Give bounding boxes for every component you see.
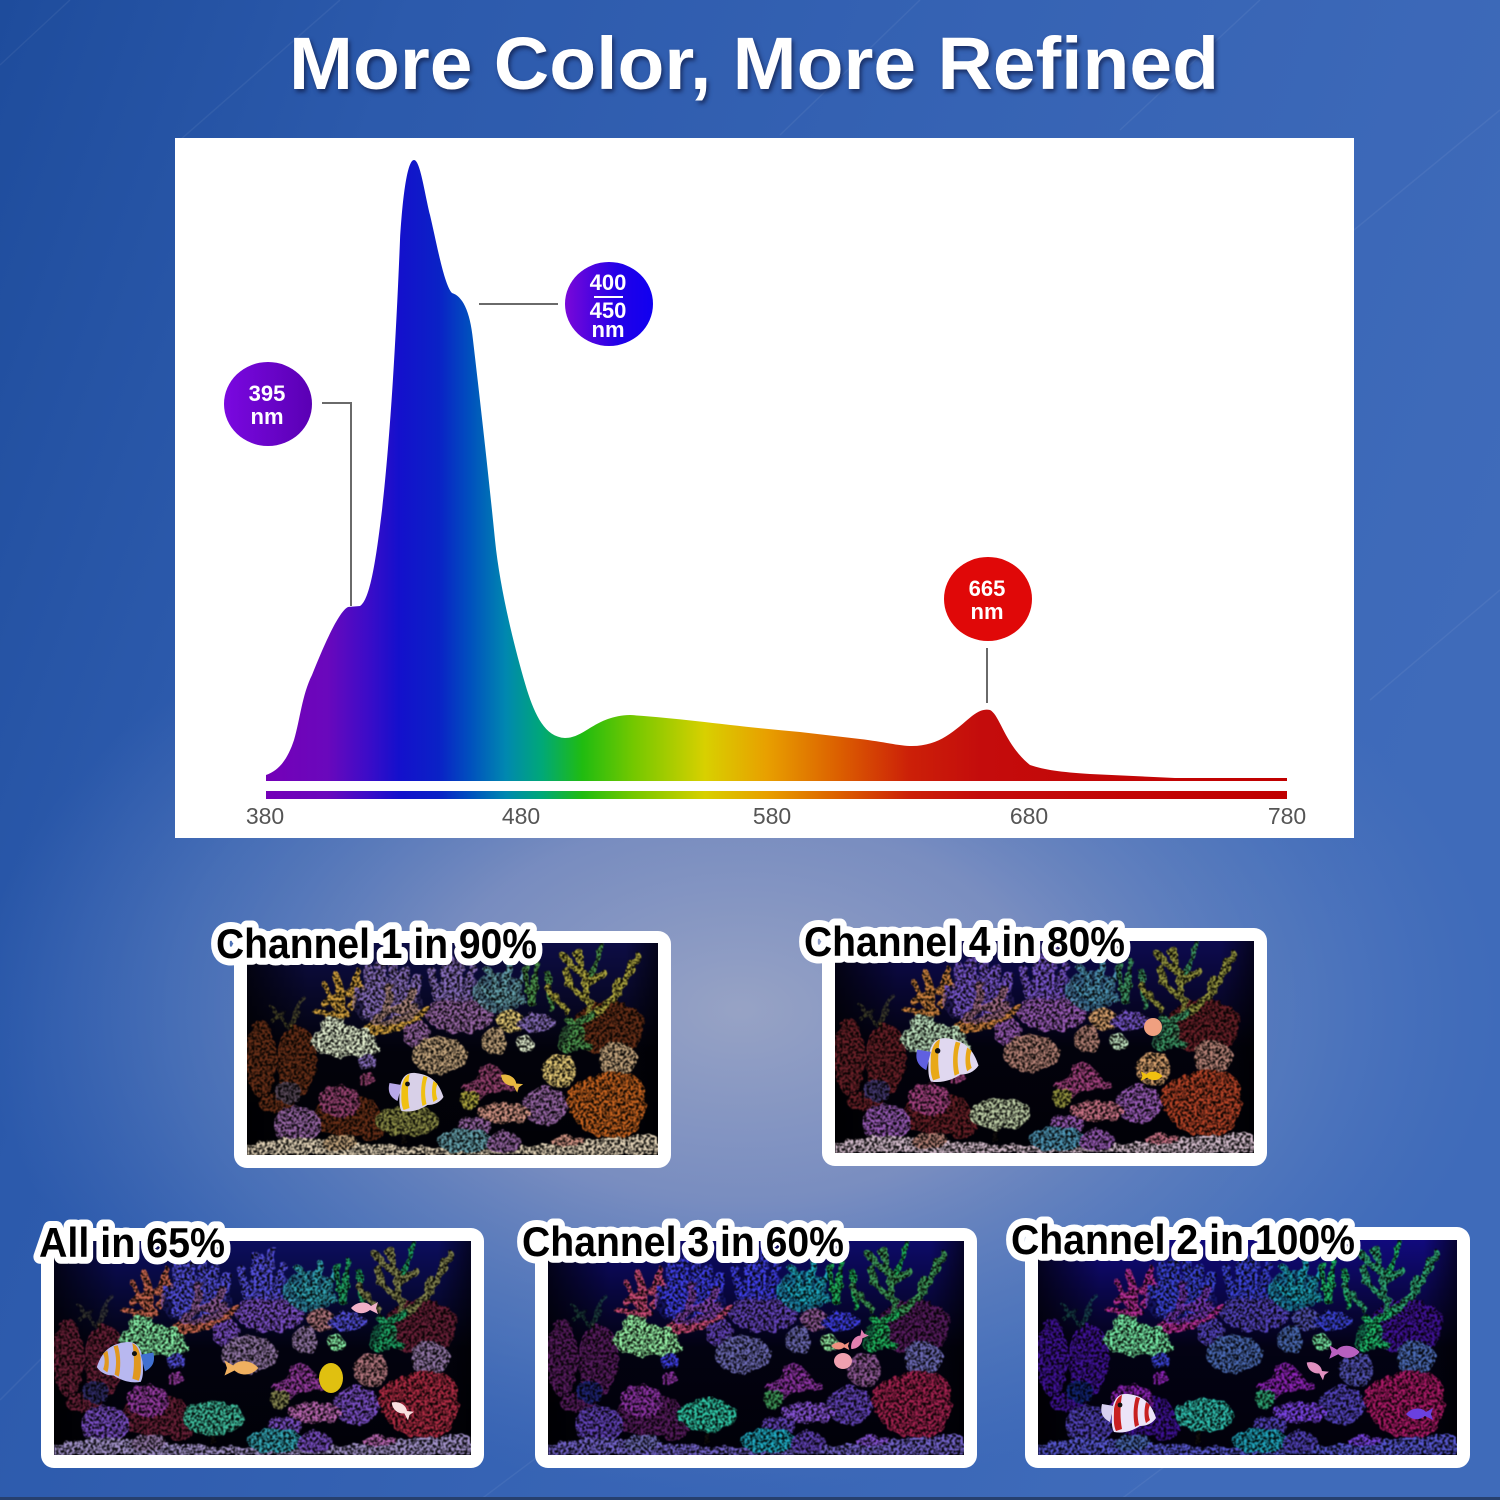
aquarium photo — [1036, 1240, 1457, 1455]
panel: channel 1 in 90% — [216, 920, 671, 1168]
anemone — [969, 1098, 1031, 1130]
anemone — [677, 1398, 737, 1432]
callout: 400-450 nm — [479, 262, 653, 346]
axis labels: 580 — [753, 803, 791, 829]
label: Channel 2 in 100% — [1011, 1216, 1355, 1263]
fish — [831, 1342, 849, 1350]
aquarium photo — [245, 943, 658, 1155]
fish — [97, 1342, 154, 1382]
label: All in 65% — [39, 1219, 225, 1266]
callout: 400-450 nm: 400 — [590, 270, 626, 295]
title: More Color, More Refined — [289, 22, 1219, 105]
callout: 665 nm: 665 — [969, 576, 1005, 601]
aquarium photo — [833, 941, 1254, 1153]
fish — [389, 1073, 444, 1112]
callout: 400-450 nm: 450 — [590, 298, 626, 323]
fish — [916, 1038, 979, 1082]
aquarium photo — [546, 1241, 964, 1455]
label: Channel 3 in 60% — [522, 1218, 844, 1265]
panel: channel 3 in 60% — [522, 1218, 977, 1468]
label: Channel 1 in 90% — [216, 920, 537, 967]
panel: channel 2 in 100% — [1011, 1216, 1470, 1468]
axis labels: 780 — [1268, 803, 1306, 829]
callout: 665 nm — [944, 557, 1032, 703]
callout: 400-450 nm: nm — [592, 317, 624, 342]
anemone — [181, 1401, 245, 1435]
axis labels: 680 — [1010, 803, 1048, 829]
callout: 665 nm: nm — [970, 599, 1004, 624]
anemone — [1175, 1398, 1235, 1432]
axis labels: 480 — [502, 803, 540, 829]
axis labels: 380 — [246, 803, 284, 829]
label: Channel 4 in 80% — [804, 918, 1125, 965]
callout: 395 nm: nm — [250, 404, 284, 429]
spectrum bar — [266, 791, 1287, 799]
callout: 395 nm: 395 — [249, 381, 285, 406]
anemone — [375, 1106, 439, 1136]
aquarium photo — [52, 1241, 471, 1455]
spectrum curve — [266, 160, 1287, 781]
panel: all in 65% — [39, 1219, 484, 1468]
axis labels — [246, 803, 1306, 829]
fish — [1101, 1394, 1156, 1433]
panel: spectrum chart — [175, 138, 1354, 838]
panel: channel 4 in 80% — [804, 918, 1267, 1166]
callout: 395 nm — [224, 362, 351, 606]
